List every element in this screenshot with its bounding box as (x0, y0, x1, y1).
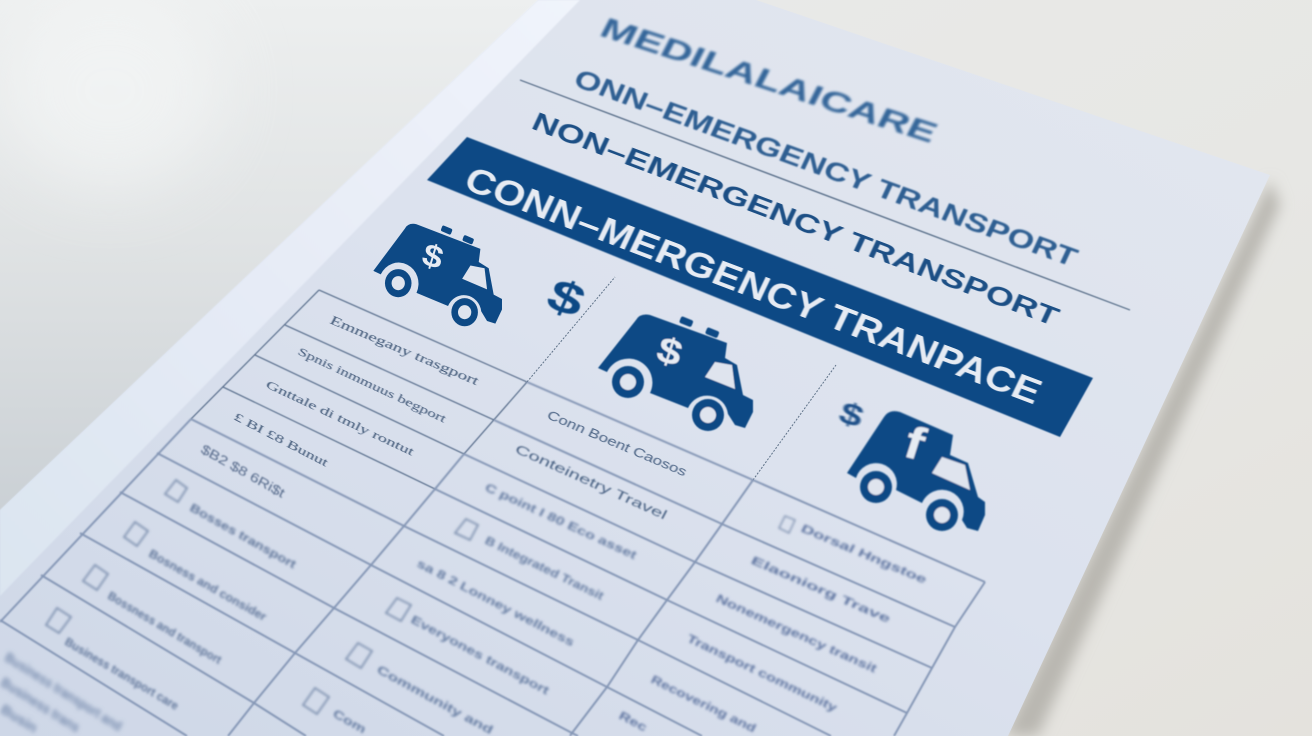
blurred rows: Bosness and consider (147, 547, 269, 624)
paper folded edge highlight (0, 0, 580, 596)
icon: van with letter f, right column: f (898, 416, 932, 470)
blurred rows: Bosses transport (188, 501, 298, 571)
subtitle line 1: ONN–EMERGENCY TRANSPORT (569, 65, 1082, 272)
grid sharp part (191, 290, 527, 489)
row label 2: Spnis inmmuus begport (296, 345, 449, 426)
checkboxes left column (46, 480, 187, 633)
row label 1: Emmegany trasgport (328, 313, 482, 388)
right column row 1: Dorsal Hngstoe (799, 522, 929, 586)
icon: van with dollar, left column (373, 224, 502, 326)
right column row 4: Transport community (685, 632, 840, 715)
blurred rows: Community and (375, 663, 495, 736)
title: MEDILALAICARE (595, 12, 943, 149)
table text: left column (0, 313, 482, 736)
column label 1: Conn Boent Caosos (545, 408, 690, 479)
row label 3: Gnttale di tmly rontut (264, 378, 417, 459)
right column row 3: Nonemergency transit (714, 592, 879, 675)
right column row 6: Rec (617, 709, 649, 734)
right column row 5: Recovering and (649, 673, 758, 735)
blurred rows (331, 481, 639, 736)
blurred rows: C point I 80 Eco asset (483, 481, 639, 562)
table text: right column (617, 516, 929, 735)
banner text: CONN–MERGENCY TRANPACE (459, 159, 1048, 412)
blurred rows: Everyones transport (409, 613, 551, 697)
blurred rows: sa 8 2 Lonney wellness (415, 557, 577, 649)
column dividers dotted top (527, 277, 836, 480)
icon: dollar sign, left column: $ (539, 268, 593, 327)
banner (427, 137, 1093, 437)
paper shadow (1004, 180, 1280, 736)
blurred rows: Bossness and transport (106, 589, 224, 667)
icon: van with dollar, left column: $ (418, 237, 447, 277)
blurred rows: B Integrated Transit (483, 534, 606, 603)
right column checkbox (779, 516, 795, 533)
icon: van with letter f, right column (847, 411, 985, 531)
grid blurred part (0, 382, 985, 736)
icon: van with dollar, middle column (598, 315, 753, 431)
heading rule (520, 80, 1130, 310)
checkboxes middle column (303, 519, 478, 714)
blurred rows: Business transport care (63, 635, 181, 713)
column label 2: Conteinetry Travel (513, 442, 669, 522)
right column row 2: Elaoniorg Trave (749, 554, 893, 626)
icon: van with dollar, middle column: $ (652, 329, 687, 374)
icon: dollar sign, right column: $ (835, 395, 868, 434)
blurred rows (63, 501, 298, 713)
table grid (0, 277, 985, 736)
row label 4: £ BI £8 Bunut (232, 410, 331, 470)
blurred rows: Com (331, 707, 368, 736)
heading block (520, 12, 1130, 332)
row label 5: $B2 $8 6Ri$t (199, 442, 287, 501)
table text: middle column (303, 408, 690, 736)
subtitle line 2: NON–EMERGENCY TRANSPORT (527, 108, 1063, 332)
